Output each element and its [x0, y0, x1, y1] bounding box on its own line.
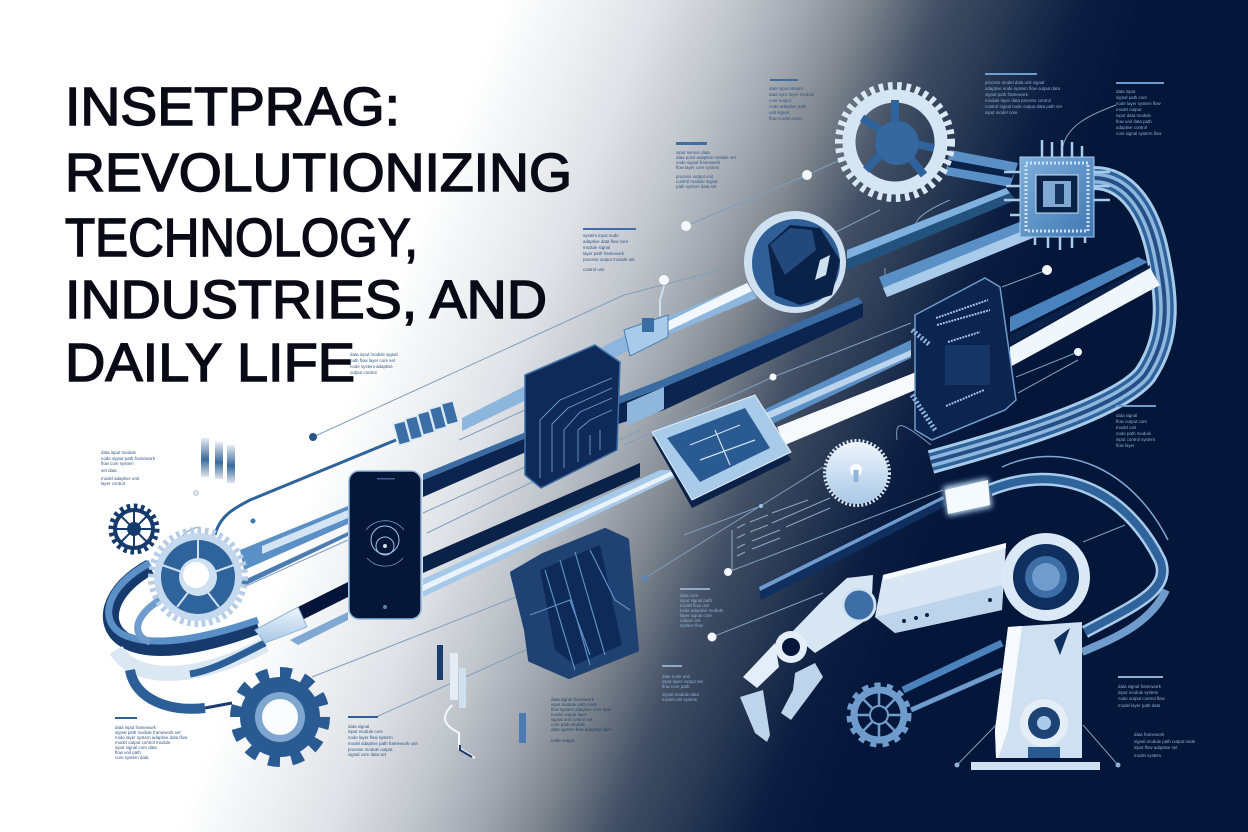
caption block bottom centre: signal core data set	[348, 752, 387, 757]
caption block under title: path flow layer core set	[350, 358, 396, 363]
caption block far right: signal path core	[1116, 95, 1148, 100]
lower right bar	[759, 496, 946, 600]
caption block bottom right	[1134, 732, 1196, 758]
caption block right middle: node path module	[1116, 431, 1152, 436]
caption block far right: data input	[1116, 89, 1136, 94]
caption block near chip: input module path node	[551, 702, 597, 707]
caption block bottom left: model output control module	[115, 740, 171, 745]
caption block near chip: flow system adaptive core data	[551, 707, 612, 712]
caption block upper left: data point adaptive module set	[676, 155, 737, 160]
caption block upper left: process output unit	[676, 174, 714, 179]
caption block mid left	[583, 228, 636, 272]
caption block near bar chart: flow core system	[101, 461, 134, 466]
caption block near bar chart	[101, 450, 156, 486]
caption block bottom left: data input framework	[115, 725, 157, 730]
upper left light band	[462, 283, 757, 431]
light ribbon lower	[423, 470, 690, 597]
caption block upper left: input sensor data	[676, 150, 710, 155]
main dark ribbon mid	[298, 582, 348, 620]
small navy gear	[111, 506, 157, 552]
caption block far right: adaptive control	[1116, 125, 1147, 130]
caption block near bar chart: node signal path framework	[101, 456, 156, 461]
caption block right middle: flow layer	[1116, 443, 1135, 448]
caption block far right: input data module	[1116, 113, 1151, 118]
caption block top right: module layer data process control	[985, 98, 1051, 103]
left ribbon loop	[109, 563, 265, 709]
bands to lower gear	[903, 643, 1002, 710]
caption block bottom centre: model adaptive path framework unit	[348, 741, 418, 746]
bar chart icon	[201, 438, 235, 483]
caption block right middle: model unit	[1116, 425, 1137, 430]
caption block upper left: flow layer core system	[676, 165, 720, 170]
caption block lower right: data signal framework	[1118, 684, 1162, 689]
caption block top center: core output	[769, 98, 792, 103]
caption block centre: system flow	[680, 623, 704, 628]
caption block bottom right: model system	[1134, 753, 1161, 758]
caption block near chip: model output layer	[551, 712, 588, 717]
blue band left gear to phone	[240, 506, 348, 586]
small white gear	[825, 441, 889, 505]
caption block lower centre: signal module data	[662, 692, 699, 697]
circuit card	[525, 345, 620, 488]
caption block under title: output control	[350, 370, 377, 375]
glass block on ribbon	[255, 607, 307, 643]
caption block near chip: node output	[551, 738, 575, 743]
band under top gear	[945, 150, 1018, 187]
caption block mid left: control unit	[583, 267, 605, 272]
caption block centre: data core	[680, 593, 699, 598]
caption block centre: output unit	[680, 618, 701, 623]
caption block upper left: node signal framework	[676, 160, 721, 165]
caption block centre: input signal path	[680, 598, 713, 603]
caption block lower centre	[662, 665, 704, 702]
caption block bottom right: signal module path output node	[1134, 739, 1196, 744]
connector block	[624, 286, 668, 356]
central device	[652, 395, 791, 508]
caption block near chip	[551, 697, 613, 743]
caption block bottom right: input flow adaptive set	[1134, 745, 1178, 750]
caption block top center	[769, 79, 815, 121]
caption block far right: core signal system flow	[1116, 131, 1162, 136]
caption block bottom left	[115, 717, 188, 760]
caption block mid left: process output module set	[583, 257, 635, 262]
band circle to chip	[847, 188, 1016, 270]
globe circle	[744, 211, 846, 313]
caption block near chip: data system flow adaptive layer	[551, 727, 613, 732]
code dash lines	[732, 498, 830, 570]
caption block bottom left: node layer system adaptive data flow	[115, 735, 188, 740]
caption block near bar chart: data input module	[101, 450, 136, 455]
small connector parts	[437, 645, 526, 758]
caption block bottom left: flow unit path	[115, 750, 141, 755]
lower rod block	[879, 221, 1040, 297]
caption block bottom right: data framework	[1134, 732, 1165, 737]
caption block lower right: node output control flow	[1118, 696, 1165, 701]
caption block bottom centre	[348, 716, 418, 757]
caption block near bar chart: model adaptive unit	[101, 476, 140, 481]
title: INDUSTRIES, AND	[65, 270, 547, 330]
circuit chip bottom	[512, 530, 637, 677]
caption block bottom centre: process module output	[348, 747, 393, 752]
caption block under title: data input module signal	[350, 352, 398, 357]
caption block centre	[680, 588, 724, 628]
connector lines and dots	[168, 105, 1125, 765]
caption block near chip: signal unit control set	[551, 717, 593, 722]
caption block lower centre: flow core path	[662, 684, 690, 689]
caption block bottom left: signal path module framework set	[115, 730, 181, 735]
tablet	[912, 278, 1016, 440]
black bar upper	[423, 297, 863, 497]
connector dots	[194, 170, 1120, 768]
caption block near bar chart: set data	[101, 468, 117, 473]
caption block far right: model output	[1116, 107, 1142, 112]
title: REVOLUTIONIZING	[65, 143, 572, 203]
caption block top center: flow model active	[769, 116, 803, 121]
caption block top center: node adaptive path	[769, 104, 807, 109]
robot base	[971, 622, 1100, 770]
caption block top center: data input stream	[769, 86, 803, 91]
caption block top center: unit signal	[769, 110, 789, 115]
main dark ribbon left	[423, 463, 640, 573]
caption block upper left	[676, 142, 737, 189]
lower gear	[850, 686, 908, 744]
caption block near bar chart: layer control	[101, 481, 125, 486]
caption block far right	[1116, 82, 1164, 136]
title	[65, 77, 572, 393]
caption block near chip: core path module	[551, 722, 585, 727]
caption block under title	[350, 352, 398, 375]
caption block right middle: data signal	[1116, 413, 1137, 418]
top thin ribbon to left gear	[215, 440, 396, 535]
glowing rectangle	[943, 478, 992, 516]
caption block near chip: data signal framework	[551, 697, 595, 702]
caption block far right: flow unit data path	[1116, 119, 1152, 124]
caption block centre: model flow unit	[680, 603, 710, 608]
caption block top right: signal path framework	[985, 92, 1029, 97]
caption block lower right	[1118, 676, 1165, 708]
caption block upper left: path system data set	[676, 184, 717, 189]
caption block lower right: input module system	[1118, 690, 1159, 695]
caption block bottom centre: data signal	[348, 724, 369, 729]
top gear	[840, 87, 950, 197]
caption block under title: node system adaptive	[350, 364, 393, 369]
caption block lower centre: input layer output set	[662, 679, 704, 684]
title: TECHNOLOGY,	[65, 208, 418, 268]
phone	[349, 471, 421, 619]
caption block right middle	[1116, 405, 1156, 448]
caption block top right	[985, 73, 1063, 115]
tablet side bands	[763, 257, 1160, 445]
caption block mid left: adaptive data flow core	[583, 239, 629, 244]
caption block mid left: module signal	[583, 245, 610, 250]
caption block lower centre: model unit system	[662, 697, 698, 702]
caption block far right: node layer system flow	[1116, 101, 1161, 106]
caption block bottom left: input signal core data	[115, 745, 157, 750]
caption block bottom centre: node layer flow system	[348, 735, 393, 740]
notched block	[393, 401, 459, 445]
robot arm	[740, 533, 1090, 742]
caption block right middle: input control system	[1116, 437, 1155, 442]
caption block upper left: control module signal	[676, 179, 718, 184]
caption block bottom left: core system data	[115, 755, 149, 760]
caption block centre: node adaptive module	[680, 608, 724, 613]
title: DAILY LIFE	[65, 333, 355, 393]
caption block mid left: system input node	[583, 233, 619, 238]
lower right ribbons	[990, 456, 1168, 652]
caption block lower right: model layer path data	[1118, 703, 1161, 708]
caption block top center: data sync layer module	[769, 92, 815, 97]
chip	[1004, 140, 1110, 250]
caption block centre: layer signal core	[680, 613, 713, 618]
caption block right middle: flow output core	[1116, 419, 1148, 424]
caption block top right: input model core	[985, 110, 1018, 115]
caption block top right: process model data unit signal	[985, 80, 1044, 85]
caption block bottom centre: input module core	[348, 729, 383, 734]
left gear	[152, 531, 244, 623]
caption block mid left: layer path framework	[583, 251, 625, 256]
caption block top right: adaptive node system flow output data	[985, 86, 1060, 91]
title: INSETPRAG:	[65, 77, 400, 137]
big navy gear	[236, 673, 324, 761]
caption block lower centre: data node unit	[662, 674, 691, 679]
right ribbon loop	[931, 178, 1165, 462]
caption block top right: control signal node output data path set	[985, 104, 1063, 109]
